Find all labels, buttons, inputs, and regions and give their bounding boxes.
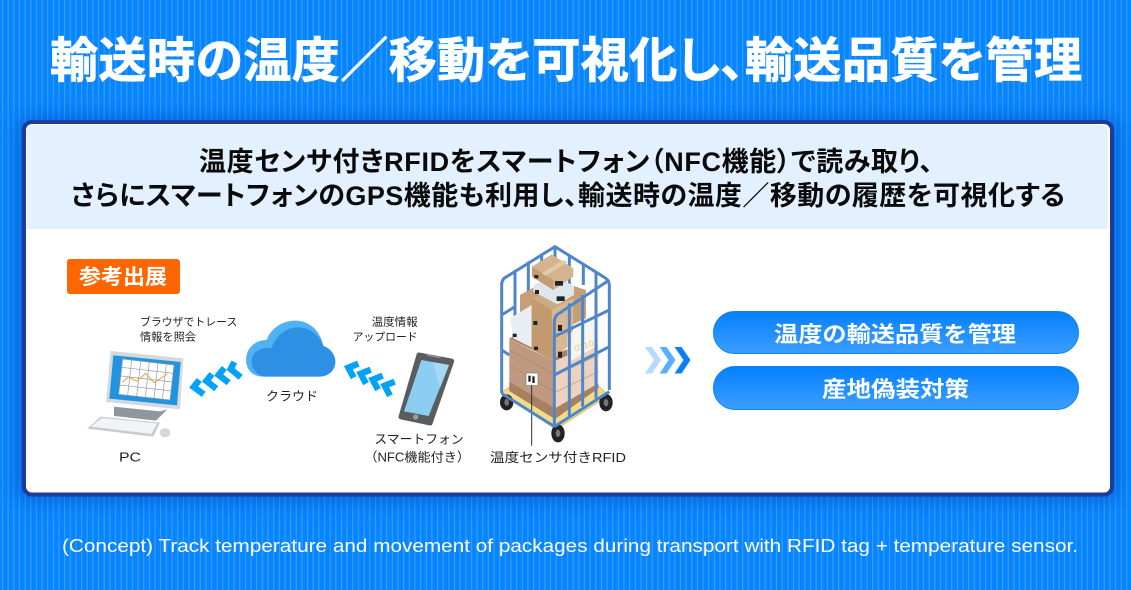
front frame — [502, 280, 609, 427]
icon: cloud — [246, 321, 335, 377]
cart label plate — [567, 317, 599, 363]
RFID tag and leader — [526, 373, 538, 446]
header text line 1: 温度センサ付きRFIDをスマートフォン（NFC機能）で読み取り、 — [199, 147, 933, 177]
icon: PC — [87, 351, 183, 437]
pill: origin fraud: 産地偽装対策 — [822, 377, 969, 402]
arrows: chevrons to results — [645, 347, 690, 374]
arrows: phone to cloud — [348, 364, 395, 396]
pill: temperature quality — [714, 312, 1078, 354]
pill: origin fraud — [714, 366, 1078, 410]
panel: main — [24, 122, 1112, 494]
label: PC: PC — [119, 450, 141, 465]
icon: smartphone — [399, 352, 454, 425]
pill: temperature quality: 温度の輸送品質を管理 — [774, 322, 1016, 347]
title: 輸送時の温度／移動を可視化し、輸送品質を管理 — [50, 35, 1082, 88]
badge: 参考出展: 参考出展 — [79, 266, 167, 289]
header band — [27, 125, 1108, 229]
diagram: system flow — [87, 314, 470, 465]
label: RFID sensor: 温度センサ付きRFID — [490, 450, 626, 465]
back frame — [502, 247, 609, 393]
label: smartphone — [364, 432, 470, 464]
label: browser trace: 情報を照会 — [140, 331, 196, 344]
badge: 参考出展 — [67, 259, 180, 294]
label: temperature upload: 温度情報 — [372, 315, 418, 328]
cart label plate: 0310 — [573, 338, 595, 354]
label: browser trace: ブラウザでトレース — [140, 314, 237, 328]
arrows: cloud to PC — [194, 362, 241, 394]
label: temperature upload: アップロード — [353, 331, 418, 344]
label: cloud: クラウド — [266, 390, 318, 404]
cart base — [500, 386, 613, 442]
footer concept text: (Concept) Track temperature and movement of packages during transport with RFID tag + temperature sensor. — [62, 536, 1078, 556]
label: browser trace — [140, 314, 237, 344]
packages — [509, 254, 598, 419]
label: temperature upload — [353, 315, 418, 344]
illustration: roll cart with packages — [500, 247, 613, 446]
label: smartphone: スマートフォン — [374, 432, 464, 446]
label: smartphone: （NFC機能付き） — [364, 450, 470, 464]
header text line 2: さらにスマートフォンのGPS機能も利用し、輸送時の温度／移動の履歴を可視化する — [71, 181, 1065, 211]
